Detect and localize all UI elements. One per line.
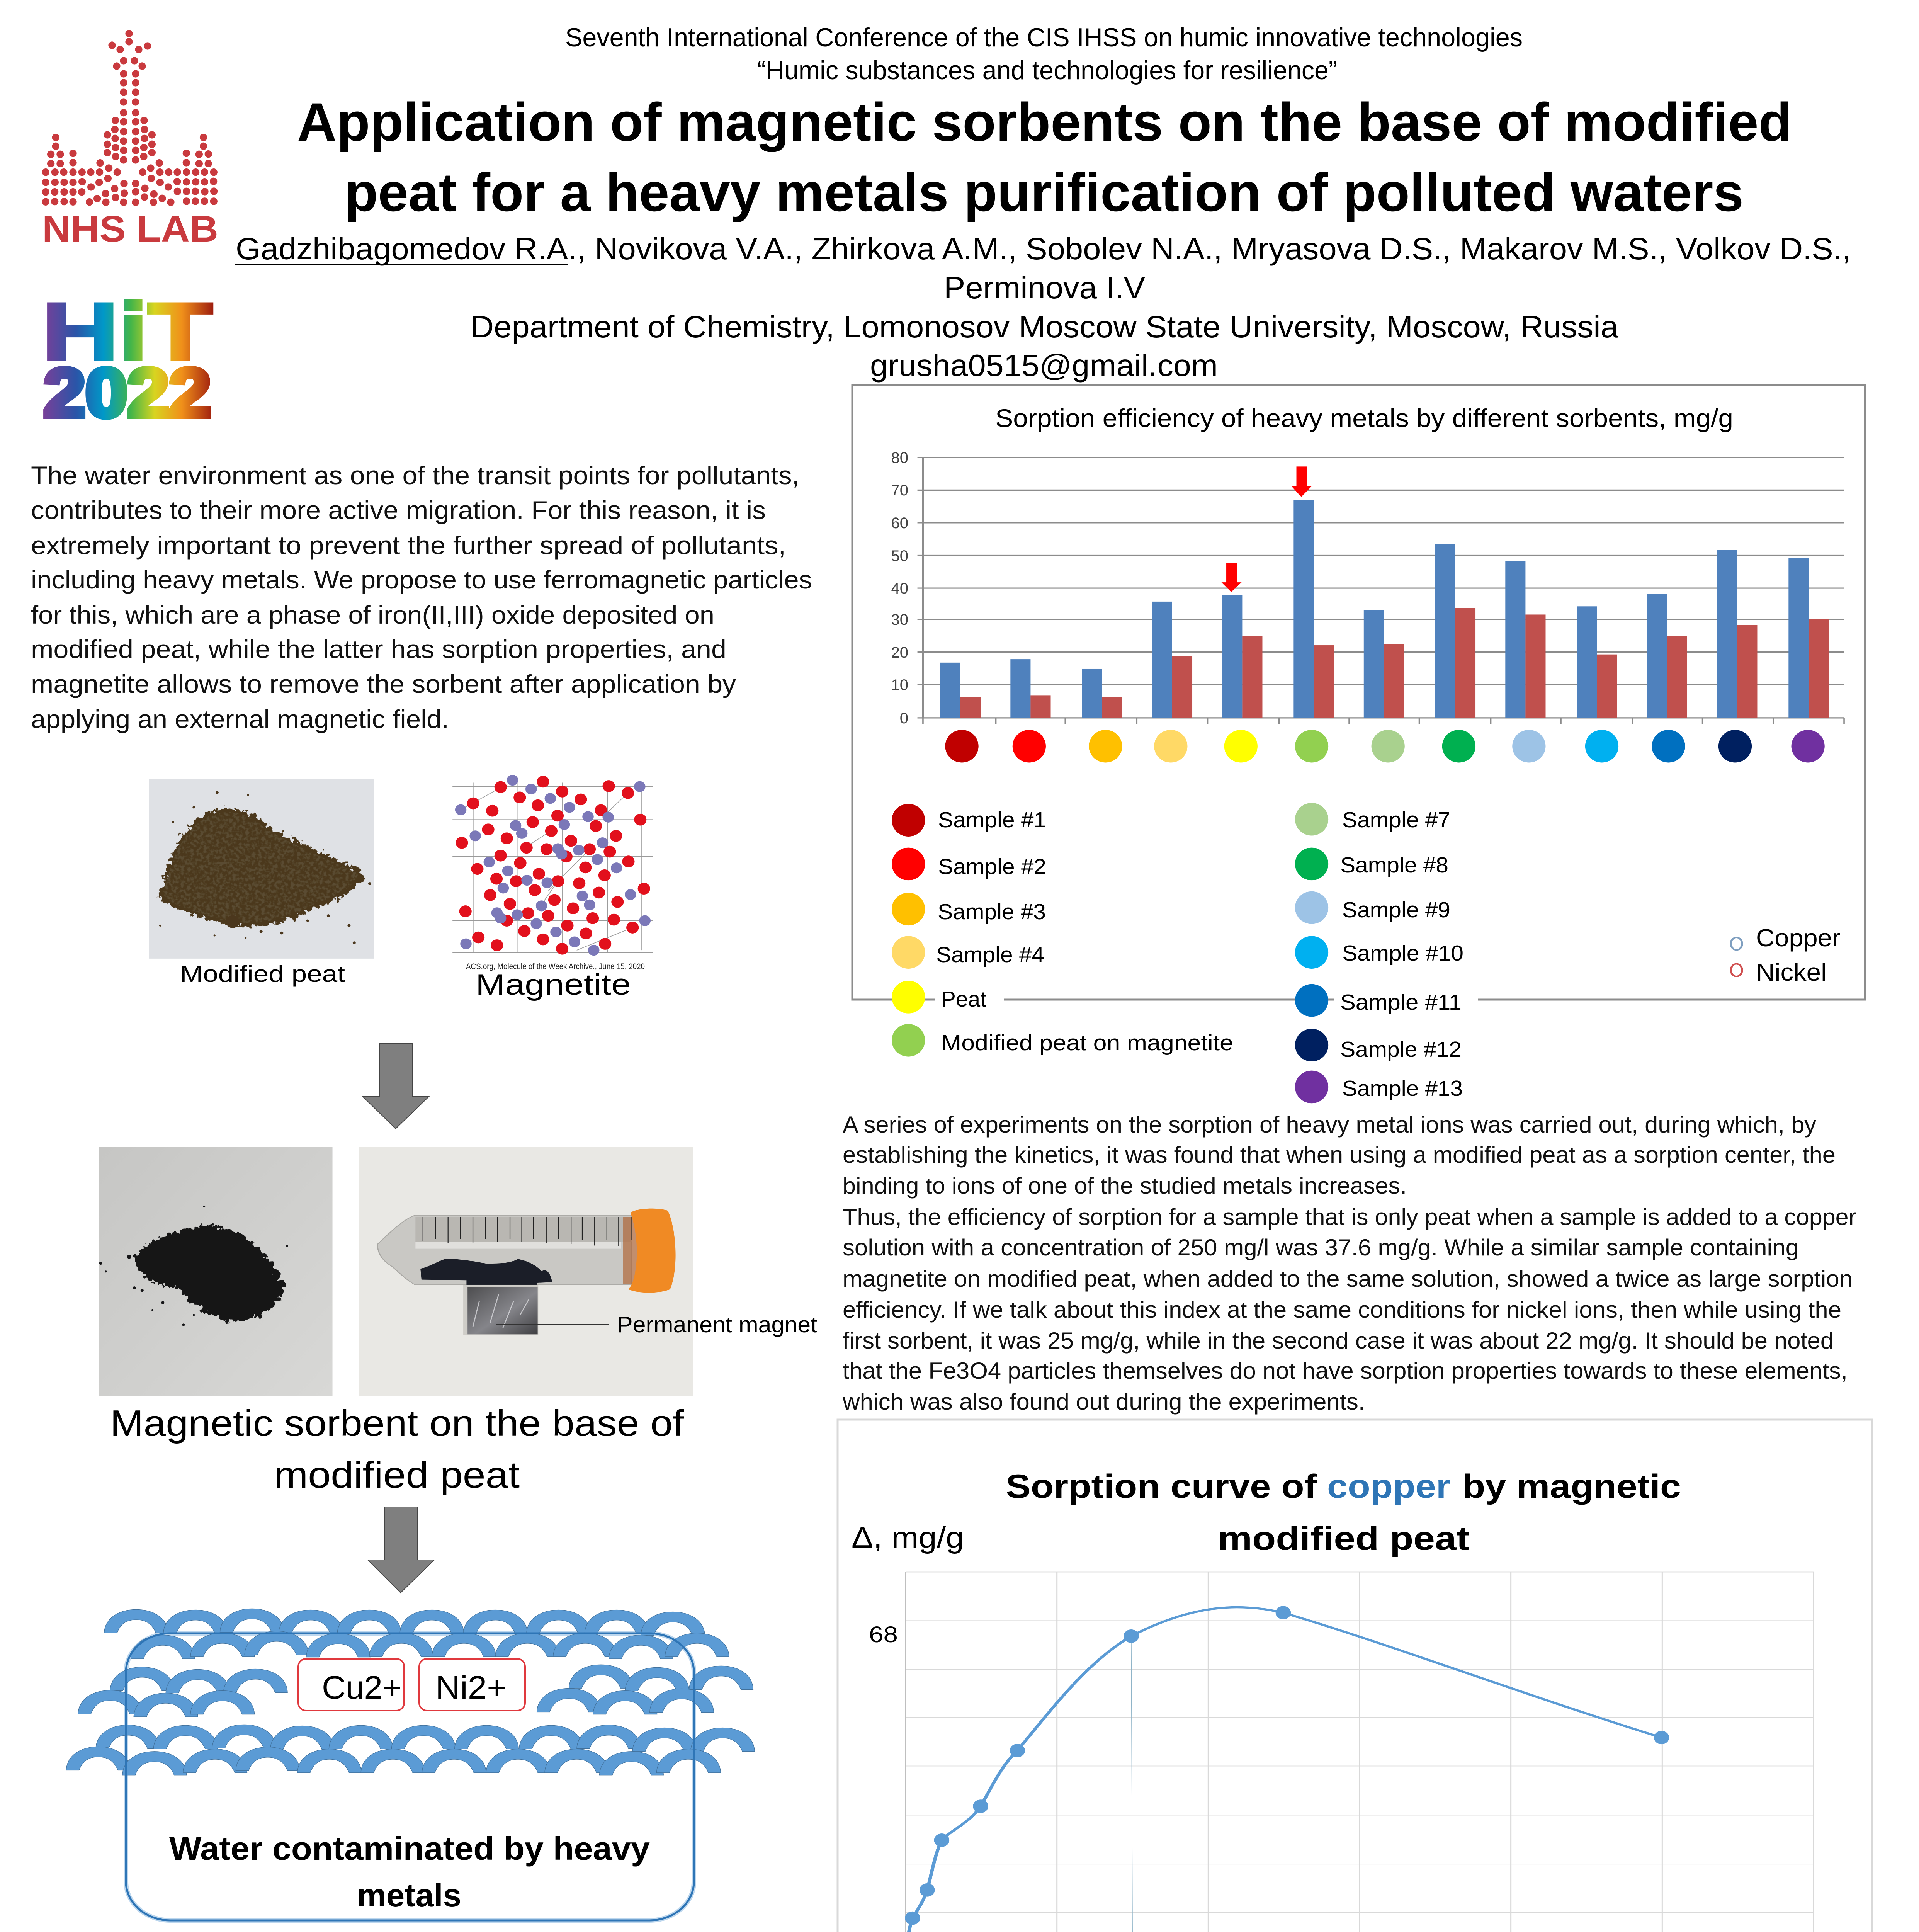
ion chip: Cu2+: Cu2+ (322, 1669, 402, 1706)
intro text: applying an external magnetic field. (31, 705, 449, 733)
series legend: Nickel (1756, 958, 1827, 986)
results text: solution with a concentration of 250 mg/l was 37.6 mg/g. While a similar sample containing (843, 1235, 1799, 1260)
waves (66, 1609, 755, 1775)
heading: magnetic sorbent: modified peat (274, 1454, 520, 1496)
authors: Perminova I.V (944, 270, 1146, 305)
y axis labels: 0 (900, 710, 908, 727)
legend labels: Sample #1 (938, 808, 1046, 832)
chart title: by magnetic (1462, 1468, 1681, 1505)
y axis labels: 50 (891, 548, 908, 565)
caption: magnetite: Magnetite (476, 968, 631, 1001)
red arrows (1221, 466, 1312, 592)
chart title (1006, 1468, 1681, 1557)
results text: establishing the kinetics, it was found that when using a modified peat as a sorption center, the (843, 1142, 1836, 1168)
series legend (1756, 924, 1841, 986)
conference header (565, 23, 1523, 85)
panel label (169, 1830, 650, 1913)
panel: bar chart of sorption efficiency (852, 385, 1865, 1103)
chart title: Sorption efficiency of heavy metals by different sorbents, mg/g (995, 404, 1733, 432)
panel: water contaminated by heavy metals (66, 1609, 755, 1920)
results text: first sorbent, it was 25 mg/g, while in the second case it was about 22 mg/g. It should be noted (843, 1328, 1834, 1354)
sample markers on axis (945, 730, 1825, 762)
callout: permanent magnet: Permanent magnet (617, 1312, 817, 1337)
y axis labels (891, 449, 908, 727)
intro text: modified peat, while the latter has sorption properties, and (31, 635, 726, 663)
legend labels: Sample #2 (938, 854, 1046, 879)
intro text: for this, which are a phase of iron(II,III) oxide deposited on (31, 600, 714, 629)
chart title: copper (1327, 1468, 1450, 1505)
arrow: to contaminated water (368, 1507, 434, 1593)
intro text: The water environment as one of the transit points for pollutants, (31, 461, 799, 490)
legend labels: Modified peat on magnetite (941, 1031, 1233, 1055)
ion chip: Ni2+ (419, 1659, 525, 1711)
conference header: “Humic substances and technologies for resilience” (757, 56, 1337, 85)
legend labels: Sample #11 (1340, 990, 1462, 1015)
photo: magnetic sorbent powder (99, 1147, 333, 1396)
authors (235, 231, 1851, 305)
y axis labels: 10 (891, 677, 908, 694)
y axis labels: 70 (891, 482, 908, 499)
series legend: Copper (1756, 924, 1841, 952)
logo: HiT 2022: HiT (42, 286, 212, 377)
authors: Gadzhibagomedov R.A., Novikova V.A., Zhirkova A.M., Sobolev N.A., Mryasova D.S., Makarov M.S., Volkov D.S., (236, 231, 1851, 266)
intro text: contributes to their more active migration. For this reason, it is (31, 496, 766, 524)
photo: tube with magnet (359, 1147, 693, 1396)
y axis labels: 20 (891, 644, 908, 661)
intro text: including heavy metals. We propose to use ferromagnetic particles (31, 565, 812, 594)
logo: NHS LAB: NHS LAB (42, 208, 218, 250)
line chart (897, 1572, 1814, 1932)
panel label: Water contaminated by heavy (169, 1830, 650, 1867)
y axis labels: 80 (891, 449, 908, 466)
title: Application of magnetic sorbents on the base of modified (297, 92, 1792, 152)
intro text: magnetite allows to remove the sorbent after application by (31, 670, 736, 698)
legend labels: Sample #9 (1342, 898, 1450, 922)
results text: efficiency. If we talk about this index at the same conditions for nickel ions, then while using the (843, 1297, 1841, 1323)
bars and grid (892, 457, 1844, 1103)
logo: HiT 2022 (42, 286, 212, 431)
caption: modified peat: Modified peat (180, 961, 345, 987)
ion chip: Ni2+: Ni2+ (435, 1669, 507, 1706)
arrow: to magnetic sorbent (362, 1043, 429, 1129)
ion chip: Cu2+ (298, 1659, 404, 1711)
affiliation: Department of Chemistry, Lomonosov Moscow State University, Moscow, Russia (471, 310, 1619, 344)
y axis labels: 40 (891, 580, 908, 597)
heading: magnetic sorbent (110, 1403, 684, 1496)
email: grusha0515@gmail.com (870, 348, 1218, 383)
photo: modified peat (149, 779, 374, 959)
intro text (31, 461, 812, 733)
logo: HiT 2022: 2022 (44, 354, 211, 431)
chart title: Sorption curve of (1006, 1468, 1317, 1505)
logo: NHS LAB (42, 30, 218, 250)
panel label: metals (357, 1877, 461, 1913)
results text: A series of experiments on the sorption of heavy metal ions was carried out, during which, by (843, 1112, 1816, 1138)
results text: which was also found out during the experiments. (842, 1389, 1365, 1415)
legend markers (892, 803, 1328, 1103)
title: peat for a heavy metals purification of polluted waters (345, 162, 1744, 223)
legend labels: Sample #4 (936, 942, 1044, 967)
y axis labels: 30 (891, 611, 908, 628)
legend labels: Peat (941, 987, 986, 1012)
legend labels: Sample #12 (1340, 1037, 1462, 1062)
source credit: ACS.org, Molecule of the Week Archive., June 15, 2020 (466, 962, 645, 971)
legend labels: Sample #3 (938, 900, 1046, 924)
results text (842, 1112, 1856, 1415)
panel: copper sorption curve (838, 1420, 1872, 1932)
legend labels: Sample #7 (1342, 808, 1450, 832)
series markers (1731, 937, 1742, 976)
intro text: extremely important to prevent the further spread of pollutants, (31, 531, 786, 560)
results text: Thus, the efficiency of sorption for a sample that is only peat when a sample is added to a copper (843, 1204, 1856, 1230)
y axis labels: 60 (891, 515, 908, 532)
results text: that the Fe3O4 particles themselves do not have sorption properties towards to these elements, (843, 1358, 1848, 1384)
diagram: magnetite crystal structure (452, 775, 653, 956)
legend labels (936, 808, 1463, 1101)
legend labels: Sample #13 (1342, 1076, 1463, 1101)
axis values: 68 (869, 1622, 898, 1647)
results text: binding to ions of one of the studied metals increases. (843, 1173, 1407, 1199)
legend labels: Sample #8 (1340, 853, 1448, 878)
legend labels: Sample #10 (1342, 941, 1463, 966)
heading: magnetic sorbent: Magnetic sorbent on the base of (110, 1403, 684, 1444)
title (297, 92, 1792, 223)
conference header: Seventh International Conference of the CIS IHSS on humic innovative technologies (565, 23, 1523, 52)
chart title: modified peat (1218, 1520, 1469, 1557)
results text: magnetite on modified peat, when added to the same solution, showed a twice as large sorption (843, 1266, 1853, 1292)
y axis title: Δ, mg/g (852, 1521, 964, 1554)
